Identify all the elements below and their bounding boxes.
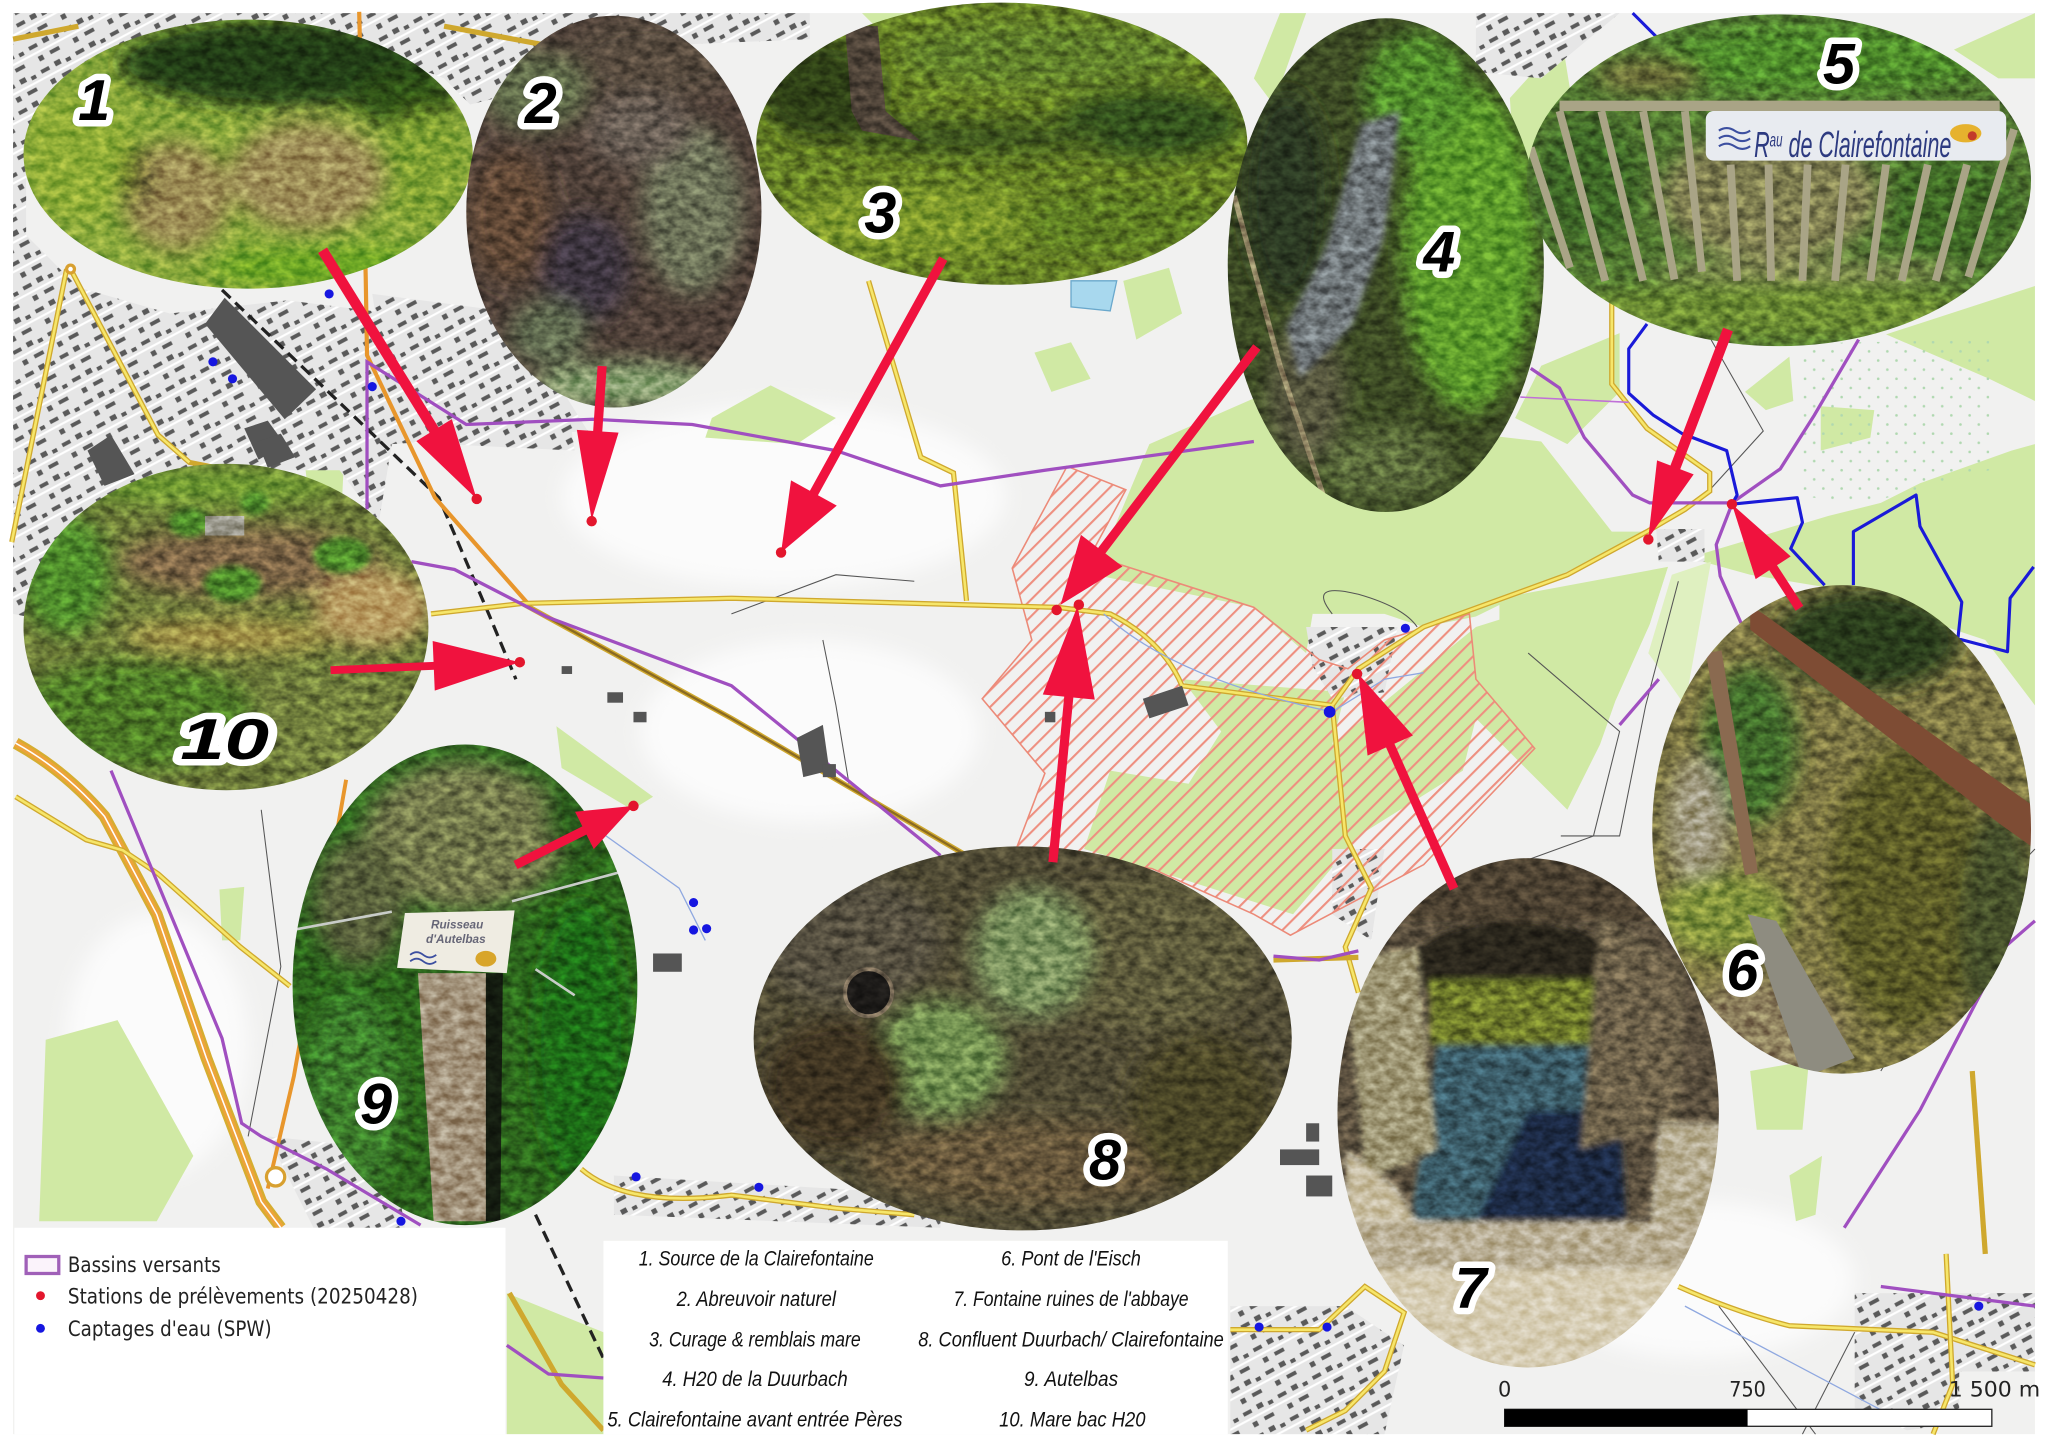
label 8: 8 [1089, 1128, 1121, 1192]
photo 8: confluence [751, 842, 1300, 1234]
photo 3: pond [751, 0, 1254, 287]
railway [222, 290, 603, 1358]
scale bar: 750 [1729, 1377, 1766, 1401]
arrow 8 [1027, 604, 1104, 865]
autelbas sign: d'Autelbas [426, 933, 486, 946]
scale bar [1498, 1377, 2040, 1426]
label 3: 3 [864, 182, 896, 246]
arrow 6 [1714, 493, 1817, 620]
rivers [588, 13, 2034, 1424]
station name list: 10. Mare bac H20 [999, 1408, 1146, 1431]
station name list: 1. Source de la Clairefontaine [639, 1248, 874, 1271]
label 6: 6 [1726, 939, 1759, 1003]
arrow 4 [1040, 331, 1278, 621]
label 7: 7 [1455, 1256, 1490, 1320]
catchment boundaries [111, 340, 2035, 1378]
station name list: 8. Confluent Duurbach/ Clairefontaine [918, 1329, 1224, 1352]
arrow 3 [758, 246, 966, 565]
arrow 5 [1630, 322, 1746, 545]
station name list: 2. Abreuvoir naturel [676, 1288, 837, 1311]
label 9: 9 [360, 1072, 392, 1136]
label 1: 1 [78, 69, 110, 133]
photo 5: Clairefontaine railing and sign [1522, 13, 2038, 353]
arrow 9 [506, 787, 643, 884]
water catchment points [208, 289, 1983, 1332]
legend panel [14, 1228, 505, 1434]
label 5: 5 [1823, 33, 1856, 97]
label 10: 10 [180, 708, 269, 772]
sampling stations [472, 494, 1737, 811]
arrow 7 [1336, 664, 1477, 899]
photo 2: natural trough [457, 13, 771, 411]
legend: catchment points: Captages d'eau (SPW) [68, 1317, 272, 1341]
legend: catchments: Bassins versants [68, 1253, 221, 1277]
station name list: 3. Curage & remblais mare [649, 1329, 861, 1352]
photo 6: Eisch bridge [1646, 581, 2038, 1084]
scale bar: 0 [1498, 1377, 1511, 1401]
autelbas sign [397, 910, 515, 973]
dotted orchard area [1800, 340, 1989, 503]
photo 7: abbey fountain [1332, 856, 1724, 1374]
autelbas sign: Ruisseau [431, 919, 483, 932]
river name sign: au [1770, 129, 1783, 151]
photo 9: Autelbas post [287, 738, 647, 1232]
river name sign: R [1754, 124, 1781, 165]
station name list: 7. Fontaine ruines de l'abbaye [953, 1288, 1189, 1311]
station name list: 5. Clairefontaine avant entrée Pères [607, 1408, 903, 1431]
buildings [88, 298, 1332, 1196]
station name list [603, 1241, 1228, 1434]
photo 10: pond and tub [7, 460, 438, 797]
station name list: 9. Autelbas [1024, 1368, 1119, 1391]
label 2: 2 [524, 72, 557, 136]
label 4: 4 [1422, 221, 1455, 285]
photo 1: source [24, 20, 473, 289]
legend: stations: Stations de prélèvements (20250428) [68, 1285, 418, 1309]
arrow 10 [330, 637, 521, 695]
river name sign [1706, 111, 2006, 165]
photo 4: Duurbach stream [1221, 13, 1554, 516]
station name list: 4. H20 de la Duurbach [662, 1368, 848, 1391]
hatched catchment area [982, 466, 1535, 935]
station name list: 6. Pont de l'Eisch [1001, 1248, 1141, 1271]
arrow 1 [305, 239, 494, 510]
scale bar: 1 500 m [1949, 1377, 2040, 1401]
roundabouts [67, 265, 285, 1186]
railing [1531, 106, 2014, 281]
arrow 2 [571, 365, 623, 521]
